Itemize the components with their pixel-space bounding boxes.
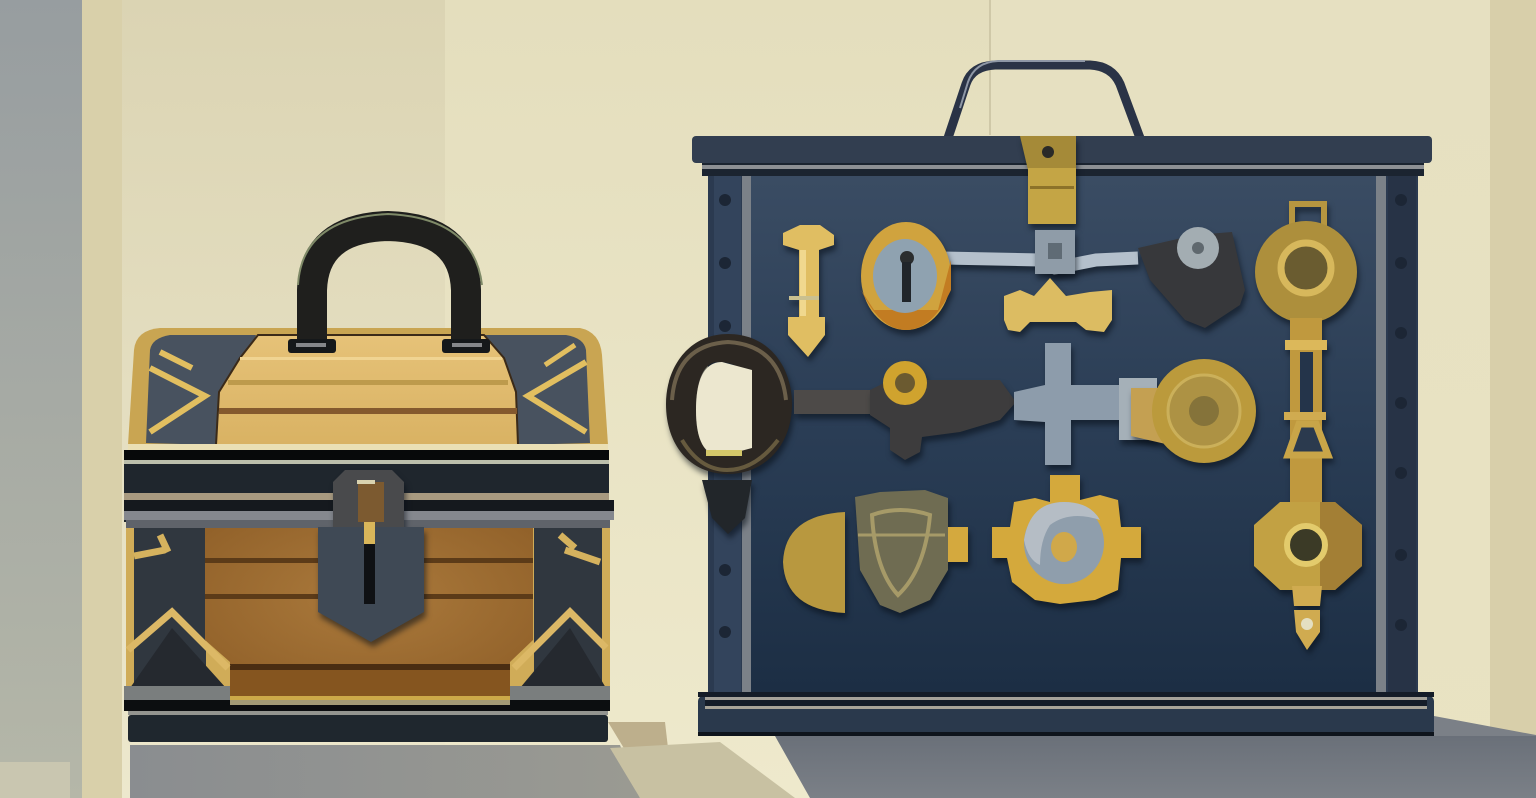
case frame: [708, 160, 1418, 710]
silver cog centre: [1035, 230, 1075, 274]
silver cross piece: [1014, 343, 1157, 465]
chest base: [124, 686, 610, 742]
gold engraved shield: [855, 490, 968, 613]
gold gear with silver disc: [992, 475, 1141, 604]
chest lock: [318, 470, 424, 642]
key case: [666, 61, 1434, 736]
half gold disc: [783, 512, 845, 613]
case top rail: [692, 136, 1432, 176]
case bottom rail: [698, 692, 1434, 736]
floor and shadows: [130, 716, 1536, 798]
small gold key: [783, 225, 834, 357]
tall ornate gold key: [1254, 204, 1362, 650]
chest bands: [124, 450, 614, 522]
chest lid: [128, 328, 608, 450]
dark blade key: [870, 361, 1016, 460]
case handle: [948, 61, 1140, 138]
keyhole medallion: [861, 222, 951, 330]
large gold medallion: [1131, 359, 1256, 463]
dark ring: [666, 334, 880, 534]
treasure chest: [124, 214, 614, 742]
silver connecting rod: [943, 258, 1138, 268]
chest body: [126, 520, 610, 700]
chest handle: [288, 214, 490, 353]
clasp: [1020, 136, 1076, 224]
gold bone piece: [1004, 278, 1112, 332]
dark shield piece: [1138, 227, 1245, 328]
